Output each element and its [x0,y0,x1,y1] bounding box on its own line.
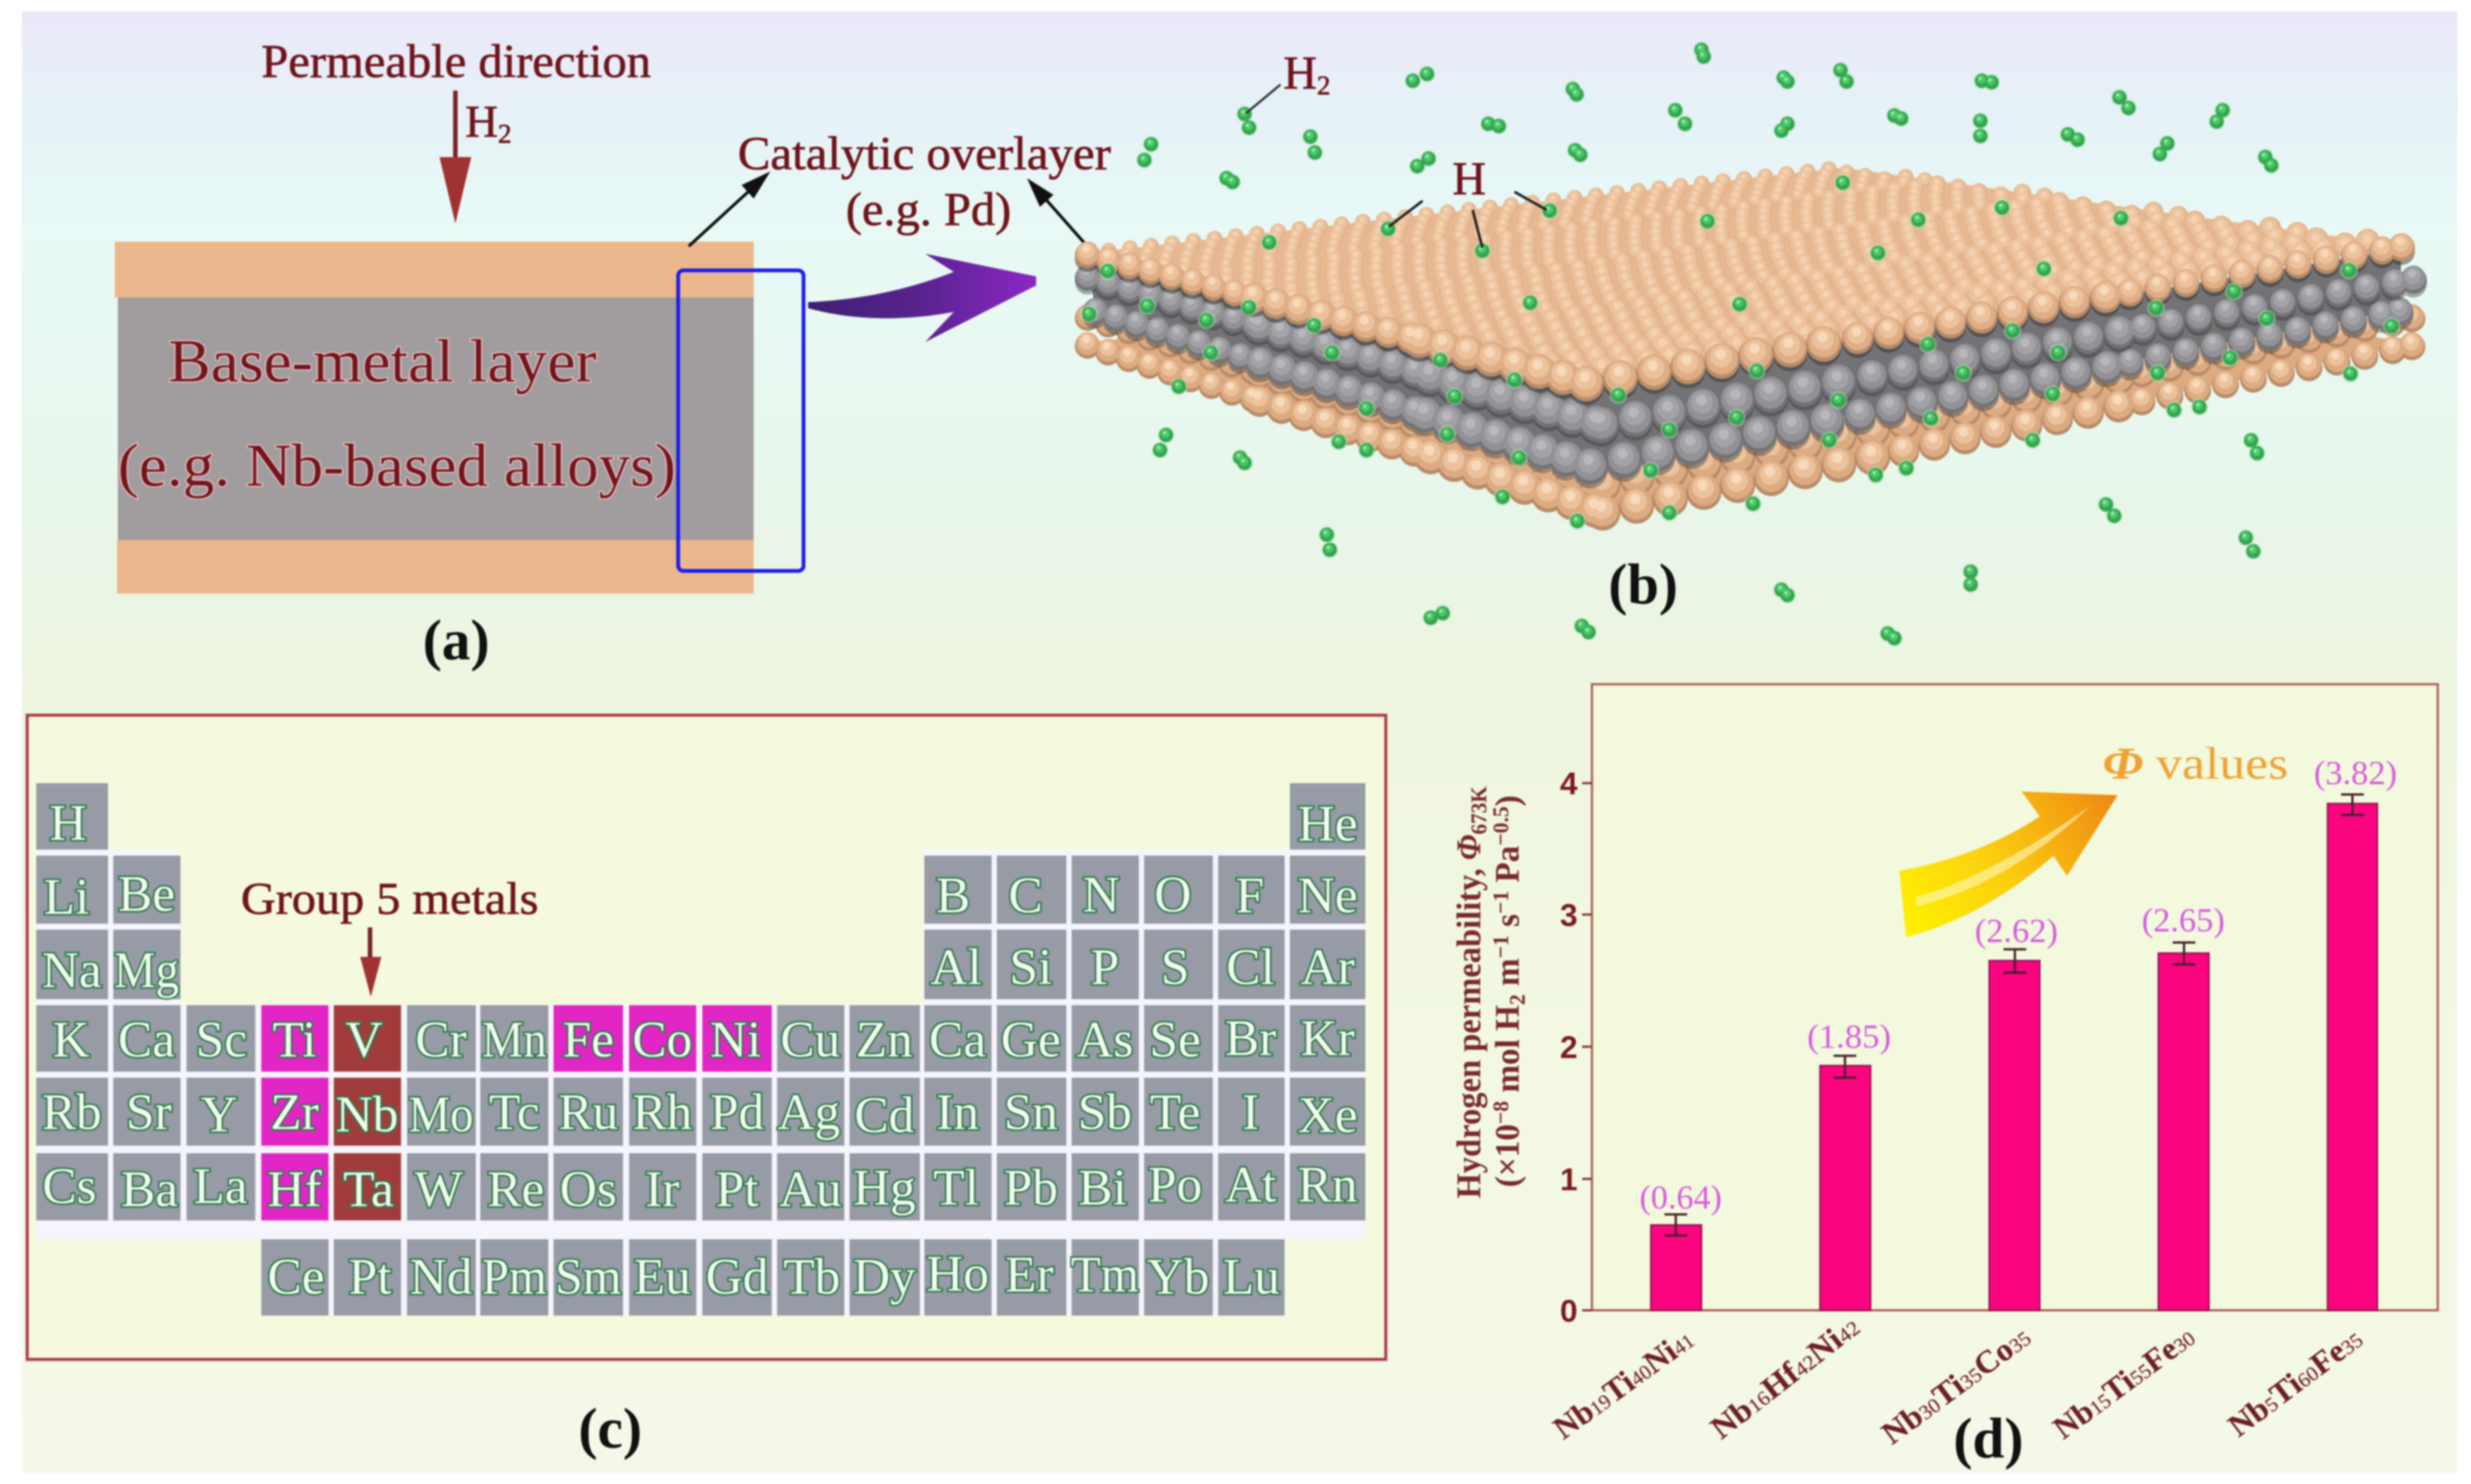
row 5: Y [200,1085,238,1143]
row 6: Ba [121,1160,178,1217]
row 6 [36,1153,1365,1220]
lanthanide row: Er [1005,1245,1053,1303]
H callout: H [1452,153,1486,205]
y axis units: −1 [1488,891,1513,914]
row 5: Cd [854,1086,915,1143]
row 4: Ca [118,1010,175,1068]
row 4: V [345,1010,383,1068]
row 4: Kr [1300,1009,1355,1066]
y axis title: 673K [1467,785,1492,835]
row 5: Sn [1004,1083,1058,1140]
lanthanide row: Ho [926,1245,989,1302]
bar: Nb5Ti60Fe35 [2328,804,2377,1310]
row 2: O [1154,865,1192,923]
row 5: Rb [42,1083,102,1140]
row 4: Zn [856,1010,913,1068]
y axis title: Hydrogen permeability, Φ [1449,833,1488,1199]
panel: (d) permeability bar chart [1449,684,2438,1470]
lanthanide row: Nd [409,1248,473,1305]
row 6: La [193,1157,248,1214]
row 5: Ag [777,1083,841,1140]
layer: bottom Pd [1086,227,2412,513]
arrow: to overlayer in a [689,171,770,246]
row 4: Sc [196,1010,247,1068]
label (d): (d) [1954,1407,2023,1470]
row 4: Co [632,1010,693,1068]
lanthanide row: Lu [1223,1248,1280,1305]
x axis labels: Nb15Ti55Fe30 [2047,1319,2201,1446]
H callout [1389,153,1547,248]
lanthanide row: Tm [1071,1245,1139,1303]
y axis numbers: 2 [1560,1029,1578,1065]
x axis labels: Nb19Ti40Ni41 [1547,1322,1700,1446]
bar: Nb15Ti55Fe30 [2158,953,2209,1310]
lanthanide row: Gd [705,1248,769,1305]
row 5: Sr [126,1083,172,1140]
periodic table frame [27,715,1386,1359]
row 5: Nb [335,1085,399,1143]
row 6: W [415,1160,464,1217]
value labels: (0.64) [1640,1179,1722,1216]
row 3: Na [42,941,102,998]
row 3: Ar [1300,938,1355,995]
error bars [1664,794,2364,1236]
y axis units: s [1488,914,1526,935]
lanthanide row: Yb [1146,1248,1210,1305]
base metal layer [118,298,754,540]
bars [1651,804,2377,1310]
bar: Nb19Ti40Ni41 [1651,1225,1701,1310]
row 3: Cl [1226,938,1275,995]
row 2: C [1008,866,1043,924]
H2 label: H [465,97,498,147]
row 5: Rh [632,1083,693,1140]
lanthanide row: Pm [482,1248,547,1305]
arrow: pointing to group 5 [360,927,381,997]
x axis labels: Nb30Ti35Co35 [1876,1319,2037,1452]
arrow: to overlayer in b [1027,178,1085,244]
row 6: Ir [645,1160,680,1217]
row 6: Pt [716,1160,758,1217]
y axis units: −1 [1488,935,1513,958]
backing of gray layers [1087,249,2402,464]
row 2: B [936,866,970,924]
label (a): (a) [423,609,489,672]
row 6: Au [779,1160,842,1217]
row 3 [36,930,1365,999]
H2 label: 2 [498,119,511,149]
row 4: Se [1149,1010,1201,1068]
row 3: P [1091,938,1119,995]
lanthanide row: Dy [853,1248,916,1305]
row 6: Re [487,1160,544,1217]
row 1: He [1297,794,1358,852]
panel: (c) periodic table [27,715,1386,1461]
row 5: I [1242,1083,1259,1140]
value labels: (1.85) [1807,1018,1891,1055]
hydrogen molecules in gas [1143,48,2272,638]
row 4: Mn [482,1010,547,1068]
row 4 [36,1005,1365,1072]
row 5: Mo [409,1085,474,1143]
y axis numbers [1560,766,1578,1328]
label (c): (c) [578,1397,642,1461]
catalytic overlayer top [115,242,754,298]
row 6: Os [560,1160,617,1217]
row 4: As [1076,1010,1134,1068]
row 4: Cu [780,1010,841,1068]
layer: top Pd surface [1086,165,2402,387]
y axis units: mol H [1488,1005,1526,1101]
row 5: Te [1150,1083,1200,1140]
alloy example text: (e.g. Nb-based alloys) [118,433,676,499]
y axis units: m [1488,958,1526,995]
layer: lower base metal [1094,305,2400,470]
panel: (b) atomic slab model [1086,48,2414,638]
row 3: Al [930,938,982,995]
H2 callout [1246,48,1331,113]
row 4: Fe [563,1010,614,1068]
value labels: (2.65) [2142,902,2225,939]
row 6: At [1225,1155,1276,1213]
row 5: Xe [1297,1086,1358,1143]
y axis units: −8 [1488,1101,1513,1124]
row 6: Bi [1078,1159,1127,1216]
table gaps [36,850,1365,1316]
row 5: Zr [270,1083,319,1140]
y axis numbers: 3 [1560,897,1578,933]
row 6: Po [1148,1155,1202,1213]
row 2: F [1236,866,1264,924]
y axis units: Pa [1488,846,1526,891]
row 1 [36,783,1365,852]
x axis labels [1547,1309,2369,1452]
row 5: Sb [1078,1083,1132,1140]
row 6: Pb [1004,1159,1058,1216]
row 6: Ta [344,1160,393,1217]
chart frame [1592,684,2438,1310]
layer: upper base metal [1086,271,2414,429]
bar: Nb30Ti35Co35 [1989,961,2040,1310]
value labels [1640,754,2397,1216]
group 5 metals label: Group 5 metals [241,874,538,924]
row 6: Hf [267,1160,322,1217]
row 2: Li [44,868,89,925]
arrow: purple zoom arrow [808,254,1036,342]
y axis numbers: 1 [1560,1162,1578,1197]
row 5 [36,1078,1365,1146]
catalytic overlayer label: Catalytic overlayer [738,128,1111,180]
row 4: Cr [415,1010,467,1068]
lanthanide row: Pt [349,1248,391,1305]
catalytic overlayer example: (e.g. Pd) [846,184,1011,236]
row 4: Ca [929,1010,986,1068]
y axis units: (×10 [1488,1121,1526,1187]
row 5: In [936,1083,979,1140]
phi values label: Φ values [2102,739,2288,788]
lanthanide row: Eu [634,1248,691,1305]
value labels: (2.62) [1975,912,2058,949]
row 5: Pd [710,1083,764,1140]
row 2: Be [118,865,175,922]
lanthanide row: Tb [783,1248,841,1305]
catalytic overlayer bottom [117,540,754,594]
lanthanide row [261,1239,1285,1316]
y axis ticks [1582,783,1592,1310]
row 2: N [1082,865,1120,923]
row 2: Ne [1297,866,1358,924]
x axis labels: Nb16Hf42Ni42 [1704,1309,1866,1446]
row 6: Hg [853,1159,916,1216]
lanthanide row: Ce [267,1248,325,1305]
row 3: Si [1010,938,1052,995]
label (b): (b) [1609,554,1678,616]
row 4: Br [1225,1009,1276,1066]
H2 callout: H [1284,48,1317,99]
row 5: Ru [558,1083,619,1140]
row 6: Cs [42,1157,97,1214]
base-metal text: Base-metal layer [168,329,597,395]
row 6: Tl [933,1159,979,1216]
y axis units: ) [1488,795,1526,807]
row 1: H [49,794,87,851]
row 3: S [1161,938,1189,995]
bar: Nb16Hf42Ni42 [1820,1066,1871,1310]
permeable direction heading: Permeable direction [261,36,651,88]
row 2 [36,856,1365,925]
arrow: rising trend [1899,791,2118,937]
blue selection box [678,270,804,571]
value labels: (3.82) [2314,754,2397,791]
row 6: Rn [1297,1155,1358,1213]
H2 callout: 2 [1317,70,1331,100]
row 4: Ti [273,1010,316,1068]
y axis units: 2 [1505,995,1530,1005]
y axis units: −0.5 [1488,807,1513,846]
row 4: Ge [1001,1010,1061,1068]
row 4: K [52,1010,90,1068]
panel: (a) membrane cross section [115,36,1111,672]
lanthanide row: Sm [555,1248,622,1305]
y axis numbers: 0 [1560,1293,1578,1328]
row 5: Tc [489,1083,539,1140]
x axis labels: Nb5Ti60Fe35 [2222,1321,2369,1444]
y axis numbers: 4 [1560,766,1578,801]
row 4: Ni [710,1010,761,1068]
arrow: H2 permeation direction [440,91,471,224]
hydrogen atoms on and in slab [1087,180,2392,521]
row 3: Mg [114,941,179,998]
